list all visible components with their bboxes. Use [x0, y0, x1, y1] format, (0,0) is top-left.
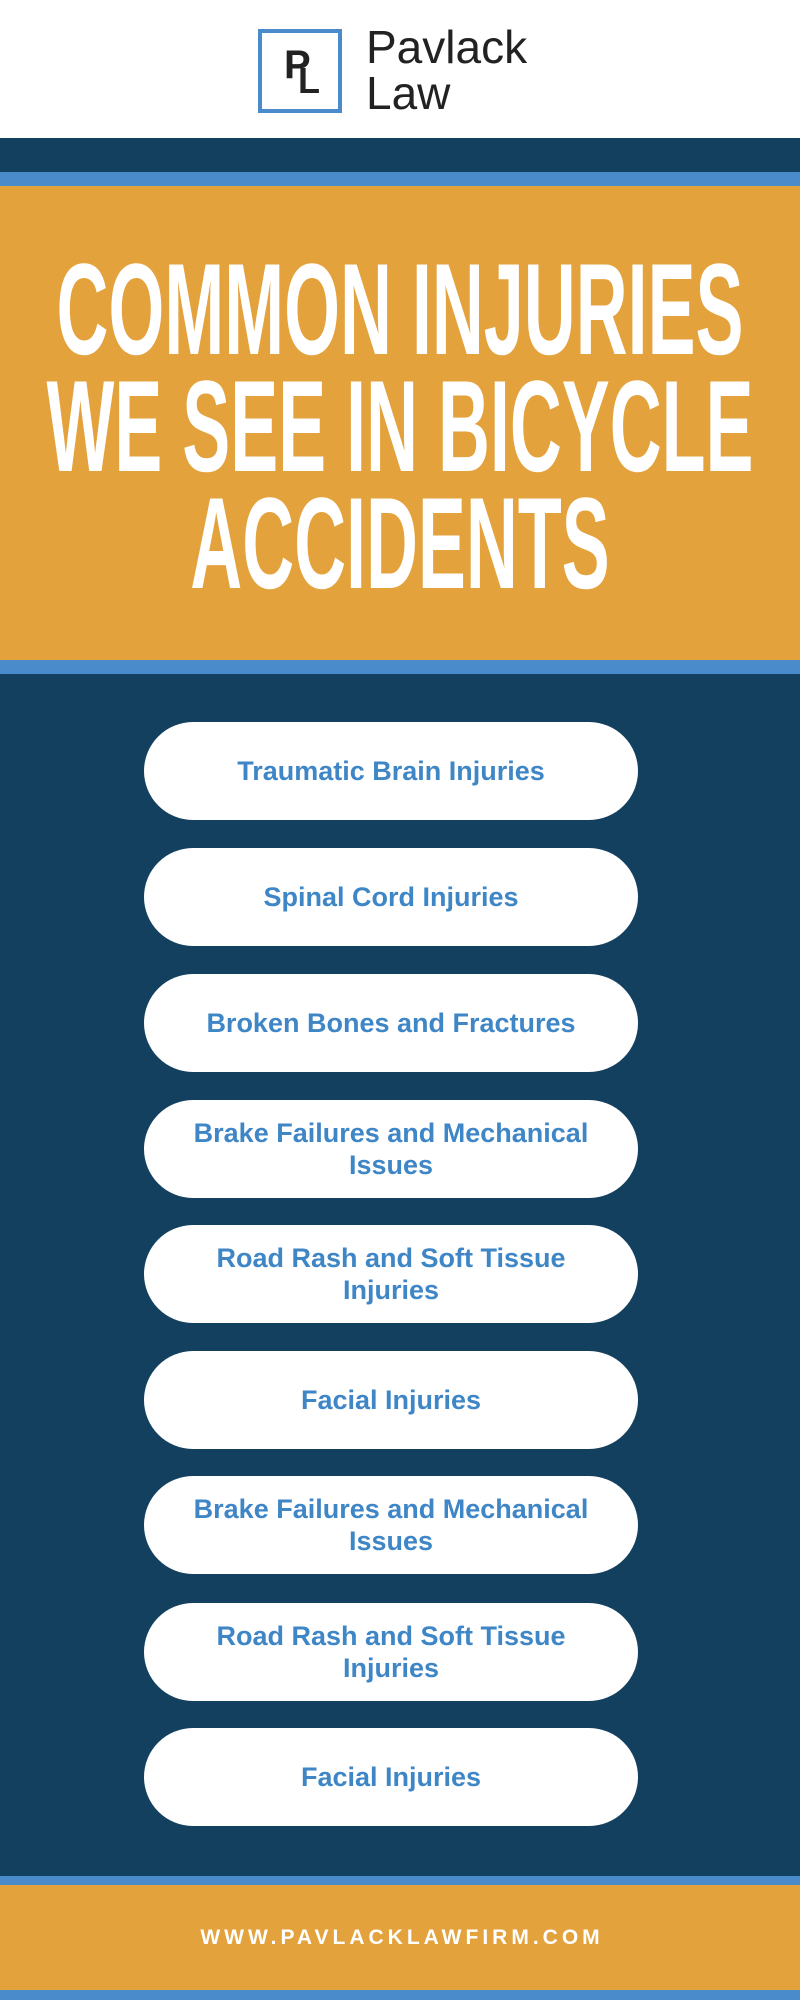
icon: logo box: P	[284, 43, 311, 87]
item 4	[144, 1100, 638, 1198]
item 3	[144, 974, 638, 1072]
item 8	[144, 1603, 638, 1701]
title: COMMON INJURIES	[57, 236, 743, 382]
item 1: Traumatic Brain Injuries	[237, 756, 545, 786]
item 6: Facial Injuries	[301, 1385, 481, 1415]
stripe	[0, 172, 800, 186]
footer	[0, 1885, 800, 1990]
title	[46, 236, 753, 616]
header: logo area	[0, 0, 800, 138]
website url: WWW.PAVLACKLAWFIRM.COM	[200, 1926, 604, 1949]
title: ACCIDENTS	[190, 470, 610, 616]
title banner	[0, 186, 800, 660]
item 9	[144, 1728, 638, 1826]
item 5	[144, 1225, 638, 1323]
logo text: Law	[366, 67, 450, 119]
item 1	[144, 722, 638, 820]
icon: logo box	[258, 29, 342, 113]
item 7	[144, 1476, 638, 1574]
item 5: Road Rash and Soft Tissue Injuries	[216, 1243, 566, 1305]
item 3: Broken Bones and Fractures	[206, 1008, 576, 1038]
logo text: Pavlack	[366, 21, 527, 73]
item 8: Road Rash and Soft Tissue Injuries	[216, 1621, 566, 1683]
item 2: Spinal Cord Injuries	[263, 882, 519, 912]
item 4: Brake Failures and Mechanical Issues	[194, 1118, 588, 1180]
logo text	[366, 21, 528, 119]
item 7: Brake Failures and Mechanical Issues	[194, 1494, 588, 1556]
icon: logo box: L	[298, 60, 320, 101]
list of injuries	[144, 722, 638, 1826]
item 9: Facial Injuries	[301, 1762, 481, 1792]
title: WE SEE IN BICYCLE	[46, 353, 753, 499]
item 6	[144, 1351, 638, 1449]
item 2	[144, 848, 638, 946]
